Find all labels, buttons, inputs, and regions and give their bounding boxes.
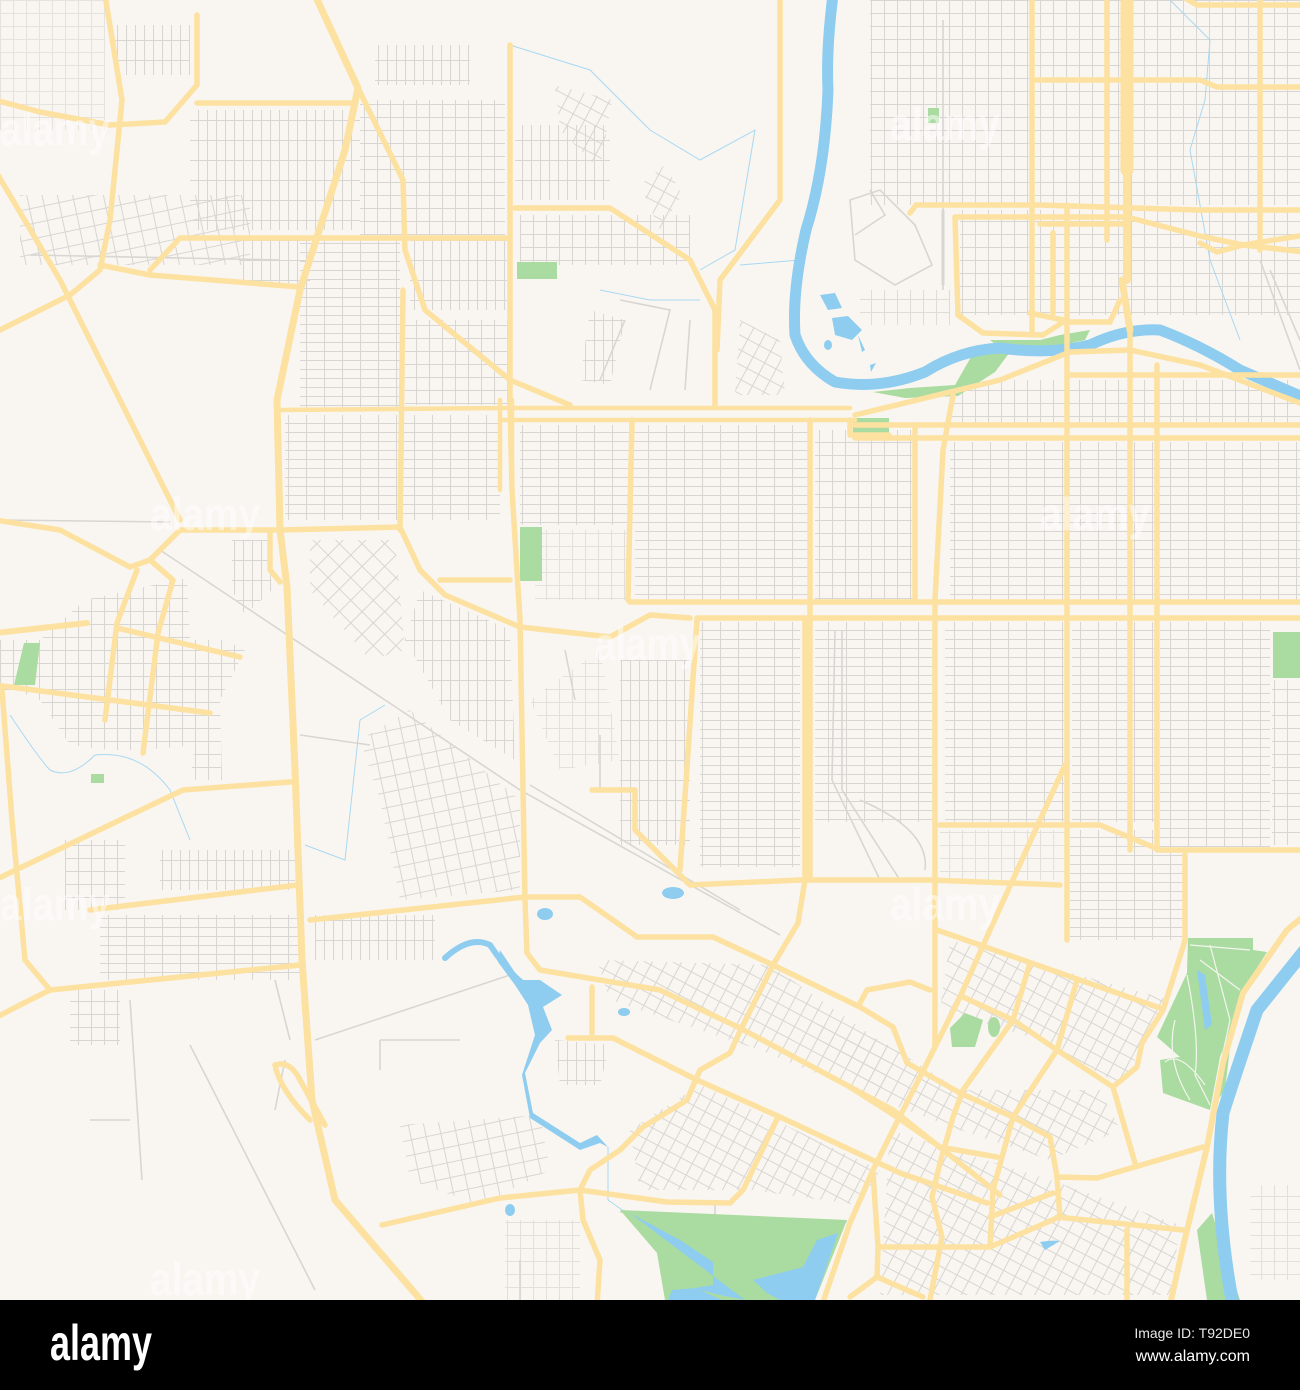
downtown north roads	[910, 205, 1300, 245]
faint watermarks: alamy	[890, 878, 1000, 930]
south central roads	[310, 897, 1060, 1217]
faint watermarks: alamy	[150, 1253, 260, 1305]
downtown north grid	[870, 0, 1300, 205]
faint watermarks: alamy	[150, 488, 260, 540]
faint watermarks: alamy	[0, 103, 110, 155]
website: www.alamy.com	[1135, 1348, 1250, 1365]
faint watermarks	[0, 98, 1150, 1305]
west neighbourhood grid	[0, 578, 245, 780]
golf course park	[1157, 938, 1267, 1110]
southeast roads	[937, 930, 1160, 1163]
faint watermarks: alamy	[595, 618, 700, 670]
water: rivers and lakes	[445, 0, 1300, 1305]
logo: alamy: alamy	[50, 1315, 152, 1371]
faint watermarks: alamy	[0, 878, 110, 930]
west neighbourhood roads	[0, 782, 290, 880]
faint watermarks: alamy	[1040, 488, 1150, 540]
footer banner	[0, 1300, 1300, 1390]
image id: Image ID: T92DE0	[1134, 1325, 1250, 1341]
faint watermarks: alamy	[890, 98, 1000, 150]
golf course paths	[1165, 945, 1250, 1105]
south park lakes	[630, 1213, 745, 1300]
